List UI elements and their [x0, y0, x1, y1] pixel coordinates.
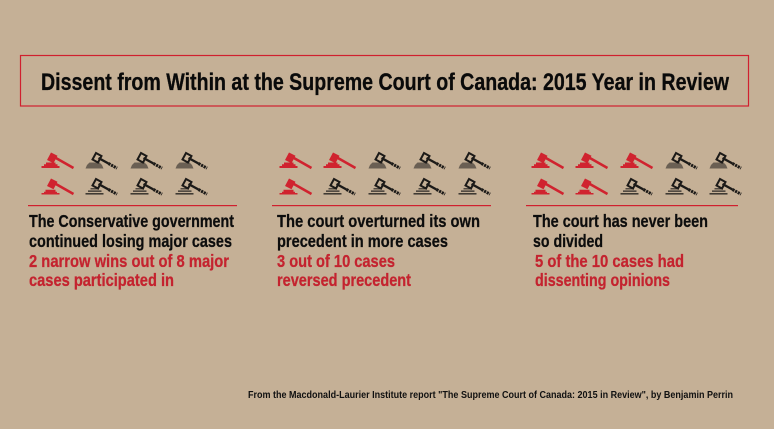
stat: narrow wins	[29, 251, 229, 290]
stat: dissenting opinions: dissenting opinions	[535, 270, 670, 290]
panel: divided court	[526, 152, 741, 290]
icon row: 2 of 8 gavels red	[42, 152, 207, 194]
stat: reversed precedent: reversed precedent	[277, 270, 411, 290]
heading: government: continued losing major cases	[29, 231, 232, 251]
stat: dissenting opinions	[535, 251, 684, 290]
stat: narrow wins: 2 narrow wins out of 8 major	[29, 251, 229, 271]
heading: precedent: The court overturned its own	[277, 211, 480, 231]
panel: overturned precedent	[272, 152, 491, 290]
panel: government losing cases	[28, 152, 237, 290]
stat: reversed precedent: 3 out of 10 cases	[277, 251, 395, 271]
heading: government: The Conservative government	[29, 211, 234, 231]
heading: divided: so divided	[533, 231, 603, 251]
heading: government	[29, 211, 234, 251]
stat: reversed precedent	[277, 251, 411, 290]
stat: narrow wins: cases participated in	[29, 270, 174, 290]
heading: precedent: precedent in more cases	[277, 231, 448, 251]
stat: dissenting opinions: 5 of the 10 cases had	[535, 251, 684, 271]
title box	[20, 56, 748, 106]
heading: divided: The court has never been	[533, 211, 708, 231]
heading: divided	[533, 211, 708, 251]
heading: precedent	[277, 211, 480, 251]
icon row: 3 of 10 gavels red	[280, 152, 490, 194]
icon row: 5 of 10 gavels red	[532, 152, 741, 194]
